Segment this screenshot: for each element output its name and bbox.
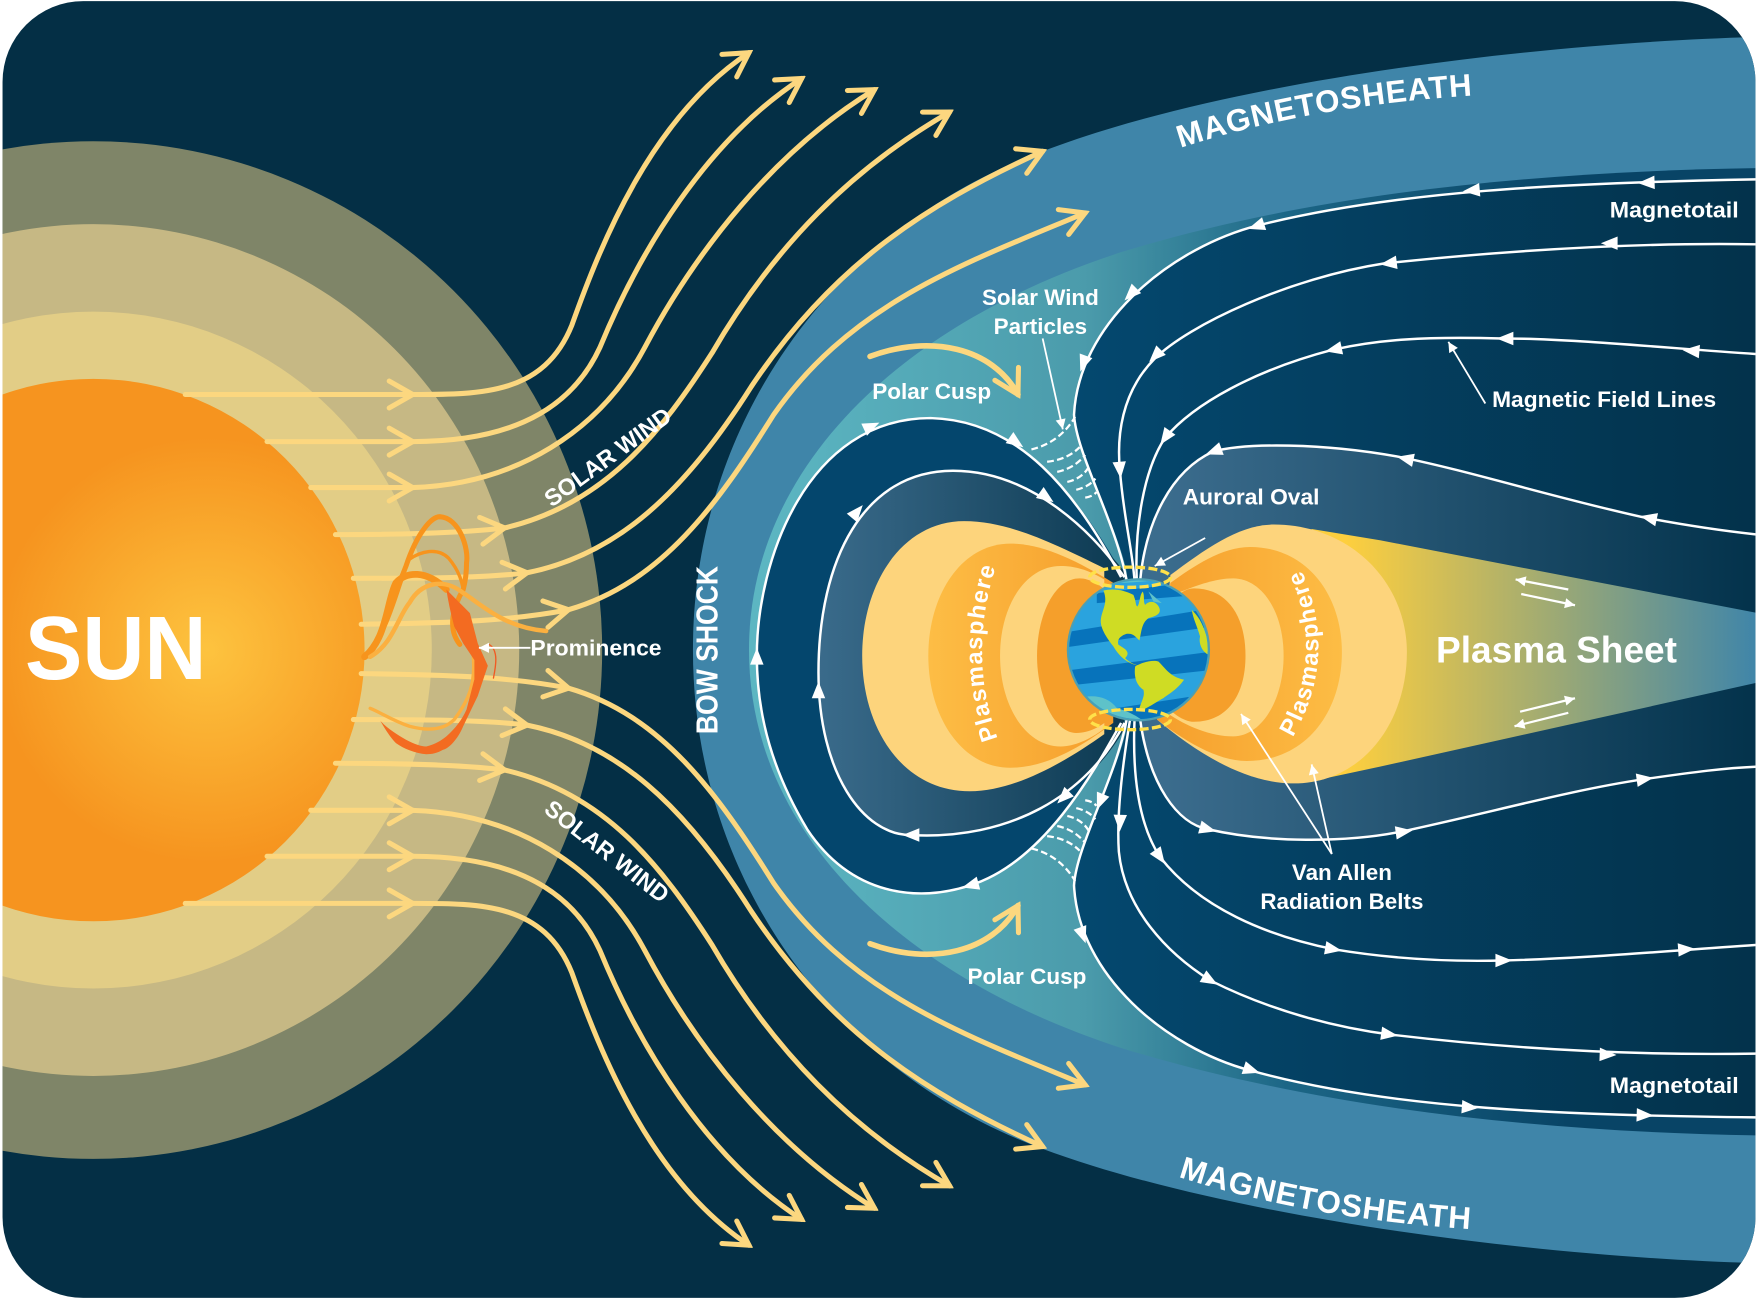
pointers: van allen belts bbox=[1241, 714, 1332, 854]
auroral oval north bbox=[1090, 567, 1170, 587]
bow shock label: BOW SHOCK bbox=[692, 566, 725, 734]
auroral oval label: Auroral Oval bbox=[1183, 484, 1319, 509]
field lines: third top bbox=[1136, 332, 1758, 581]
pointer: solar wind particles bbox=[1043, 338, 1063, 429]
field lines: fourth top bbox=[1140, 442, 1758, 581]
solar wind arrows: upper bbox=[185, 53, 1085, 624]
sun bbox=[0, 379, 365, 921]
right plasmasphere bbox=[1157, 525, 1407, 783]
van allen label: Radiation Belts bbox=[1260, 889, 1423, 914]
field lines: outer bottom bbox=[1074, 720, 1758, 1122]
magnetosheath label top: MAGNETOSHEATH bbox=[1176, 74, 1470, 148]
plasmasphere label right: Plasmasphere bbox=[1279, 572, 1324, 736]
magnetotail label bottom: Magnetotail bbox=[1610, 1073, 1739, 1098]
van allen label: Van Allen bbox=[1292, 860, 1392, 885]
magnetotail label top: Magnetotail bbox=[1610, 197, 1739, 222]
earth bbox=[1066, 578, 1210, 722]
polar cusp label bottom: Polar Cusp bbox=[968, 964, 1086, 989]
polar cusp arrow bottom bbox=[870, 906, 1018, 954]
continents bbox=[1101, 589, 1208, 711]
magnetosheath band bbox=[693, 37, 1758, 1263]
polar cusp dashed lines: bottom bbox=[1031, 800, 1096, 881]
sun label: SUN bbox=[25, 599, 207, 699]
plasma sheet flow arrows bbox=[1514, 579, 1575, 726]
magnetosheath label bottom: MAGNETOSHEATH bbox=[1180, 1156, 1470, 1229]
prominence loops bbox=[365, 517, 546, 754]
plasmasphere label left: Plasmasphere bbox=[967, 566, 998, 742]
polar cusp arrow top bbox=[870, 346, 1018, 395]
solar wind particles label: Solar Wind bbox=[982, 285, 1099, 310]
prominence label: Prominence bbox=[530, 636, 662, 661]
plasma sheet label: Plasma Sheet bbox=[1436, 629, 1677, 670]
solar wind arrows: lower bbox=[185, 674, 1085, 1245]
field lines: fourth bottom bbox=[1140, 720, 1758, 840]
pointer: prominence bbox=[479, 647, 530, 649]
field lines: second bottom bbox=[1113, 720, 1758, 1062]
solar wind label top: SOLAR WIND bbox=[539, 402, 676, 512]
polar cusp label top: Polar Cusp bbox=[872, 379, 991, 404]
sun corona layers bbox=[0, 141, 602, 1159]
magnetic field lines label: Magnetic Field Lines bbox=[1492, 387, 1716, 412]
field lines: second top bbox=[1112, 236, 1758, 581]
inner left lobe bbox=[818, 471, 1124, 835]
solar wind label bottom: SOLAR WIND bbox=[540, 795, 674, 908]
outer left lobe bbox=[757, 418, 1121, 893]
inner right lobe bbox=[1140, 446, 1671, 838]
polar cusp dashed lines: top bbox=[1031, 417, 1096, 498]
left plasmasphere bbox=[862, 521, 1113, 791]
field lines: outer left lobe bbox=[750, 416, 1121, 894]
field lines: outer top bbox=[1074, 176, 1758, 581]
auroral oval south bbox=[1090, 709, 1170, 730]
solar wind particles label: Particles bbox=[994, 314, 1087, 339]
plasma sheet bbox=[1312, 529, 1758, 781]
outer right lobe bbox=[1074, 179, 1758, 1117]
field lines: inner left lobe bbox=[812, 471, 1124, 842]
pointer: magnetic field lines bbox=[1448, 342, 1485, 403]
field lines: third bottom bbox=[1134, 720, 1758, 967]
magnetosphere teal region bbox=[749, 168, 1758, 1135]
pointer: auroral oval bbox=[1155, 538, 1205, 566]
